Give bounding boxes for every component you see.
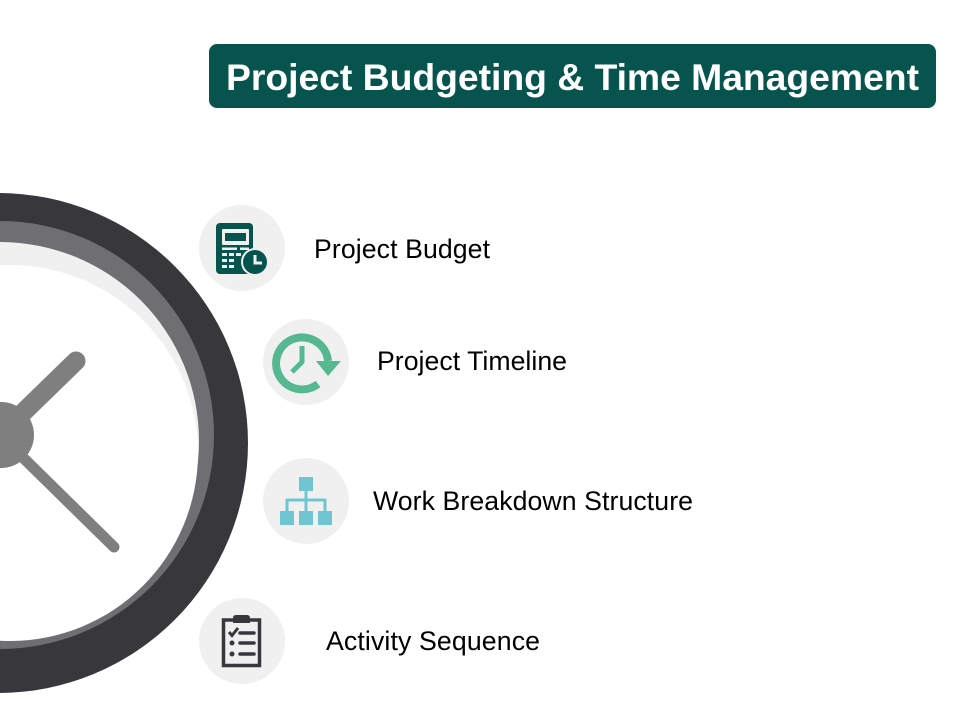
item: work breakdown structure <box>263 458 693 544</box>
icon: org chart <box>263 458 349 544</box>
minute hand <box>0 435 114 547</box>
title banner: Project Budgeting & Time Management <box>226 56 919 98</box>
icon: clockwise timer <box>263 319 349 405</box>
clock face shadow <box>0 242 199 640</box>
icon: calculator with clock <box>199 205 285 291</box>
label: activity sequence: Activity Sequence <box>326 626 540 656</box>
item: project budget <box>199 205 491 291</box>
item: project timeline <box>263 319 567 405</box>
clock inner rim <box>0 221 214 649</box>
label: work breakdown structure: Work Breakdown Structure <box>373 486 693 516</box>
title banner <box>209 44 936 108</box>
label: project budget: Project Budget <box>314 234 491 264</box>
clock illustration <box>0 193 248 693</box>
clock outer rim <box>0 193 248 693</box>
hour hand <box>0 361 76 435</box>
label: project timeline: Project Timeline <box>377 346 567 376</box>
icon: clipboard checklist <box>199 598 285 684</box>
clock face <box>0 265 198 641</box>
clock hub <box>0 402 34 468</box>
item: activity sequence <box>199 598 540 684</box>
